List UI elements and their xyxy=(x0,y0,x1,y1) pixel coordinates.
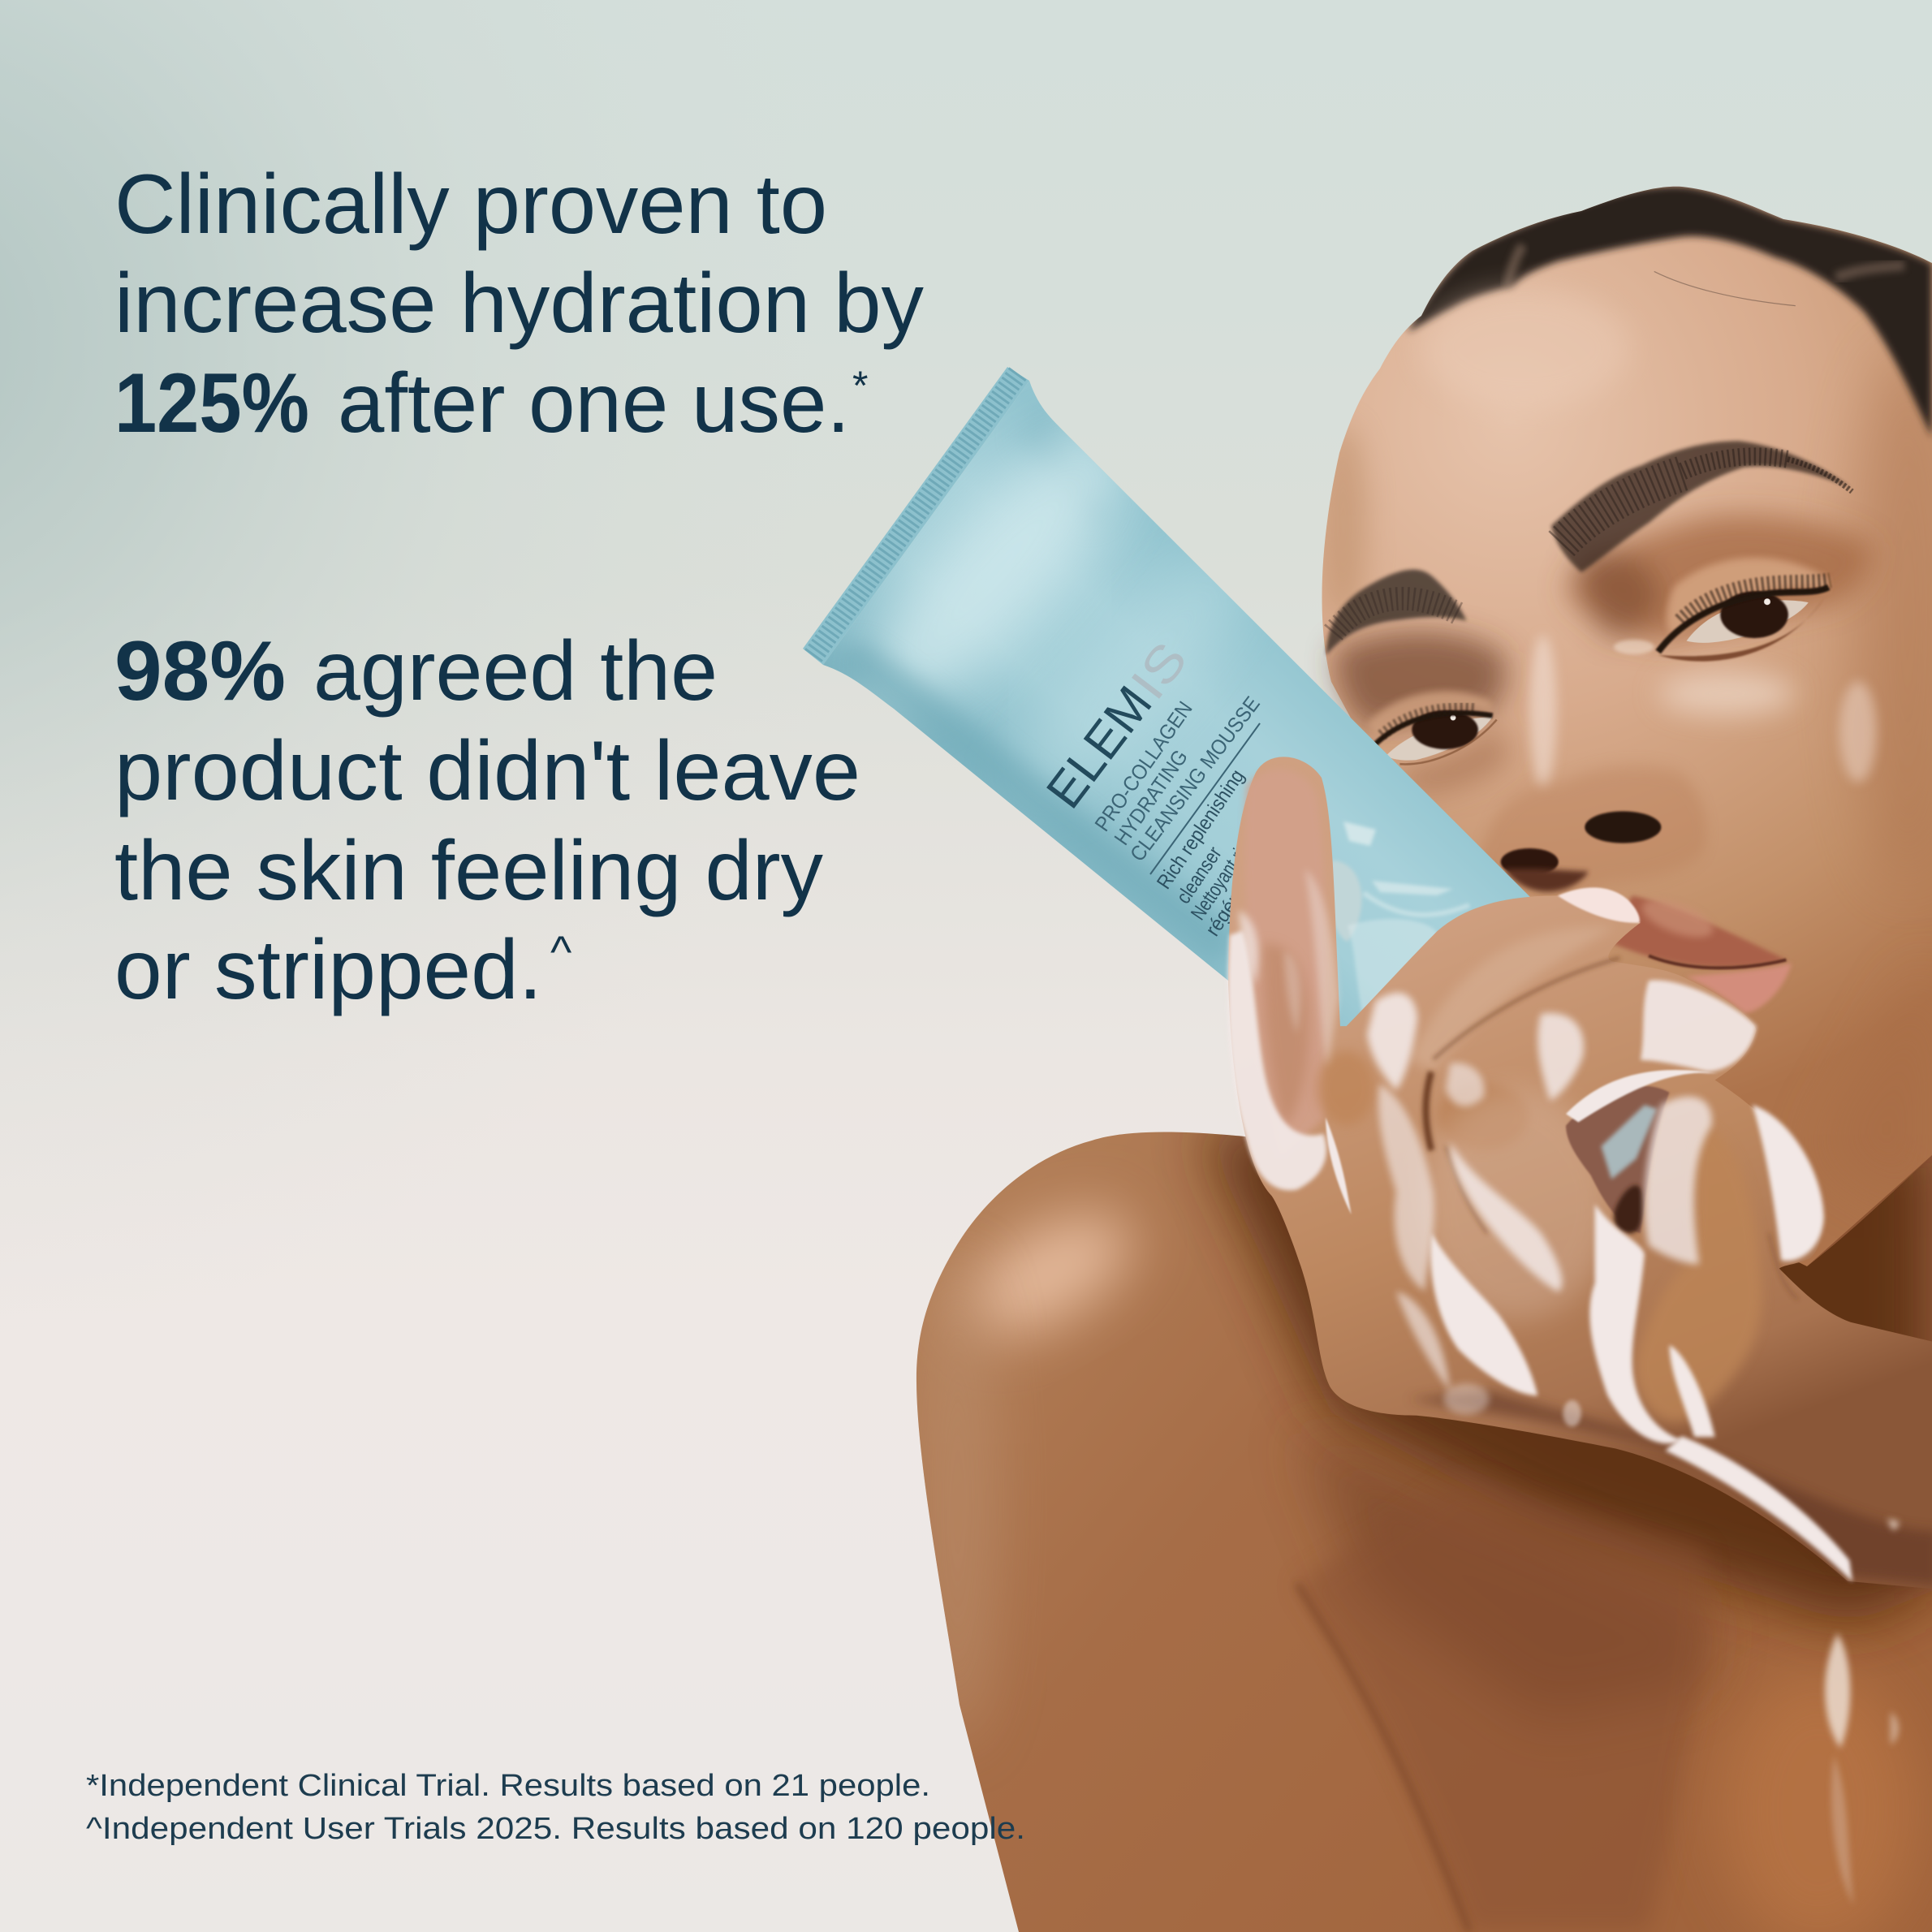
footnotes: ^Independent User Trials 2025. Results based on 120 people. xyxy=(86,1812,1025,1846)
headline: user trial claim: ^ xyxy=(550,926,571,977)
footnotes: *Independent Clinical Trial. Results based on 21 people. xyxy=(86,1769,930,1803)
arm and chest shadow band xyxy=(1307,1518,1692,1929)
product label: name and description: cleanser xyxy=(1172,843,1227,908)
tube cap between fingers xyxy=(1566,1086,1670,1233)
product label: name and description xyxy=(1089,692,1265,940)
nose and cheek highlights xyxy=(1529,635,1877,788)
product label: name and description: PRO-COLLAGEN xyxy=(1089,696,1197,835)
eye: right xyxy=(1658,558,1831,662)
product label: ELEMIS logo: ELEM xyxy=(1036,676,1163,818)
icon: left eyebrow xyxy=(1326,570,1466,655)
product label: name and description: CLEANSING MOUSSE xyxy=(1125,692,1265,866)
model: face xyxy=(1316,187,1932,1266)
headline: user trial claim: the skin feeling dry xyxy=(114,824,823,918)
eye socket shadows xyxy=(1335,515,1872,793)
headline: hydration claim: increase hydration by xyxy=(114,257,924,351)
thumbnail xyxy=(1558,887,1640,923)
headline: hydration claim: Clinically proven to xyxy=(114,157,827,252)
tube crimp xyxy=(803,367,1029,665)
foam marks on tube xyxy=(1328,822,1469,1023)
product label: ELEMIS logo: IS xyxy=(1120,632,1198,709)
tube body xyxy=(823,381,1534,1104)
headline: hydration claim: * xyxy=(852,363,868,408)
product tube xyxy=(803,367,1530,1026)
headline: user trial claim: product didn't leave xyxy=(114,724,860,818)
footnotes xyxy=(86,1769,1025,1846)
product label: name and description: Nettoyant riche xyxy=(1187,824,1265,924)
eye: left xyxy=(1368,691,1497,764)
icon: right eyebrow xyxy=(1551,441,1852,572)
finger creases xyxy=(1425,958,1798,1300)
fingers shading xyxy=(1244,770,1762,1422)
headline: user trial claim xyxy=(114,624,860,1017)
face shading xyxy=(1319,287,1630,619)
headline: hydration claim xyxy=(114,157,924,451)
headline: user trial claim: agreed the xyxy=(313,624,718,718)
stat: 98%: 98% xyxy=(114,624,286,718)
foam streaks xyxy=(1227,869,1852,1582)
stat: 125%: 125% xyxy=(114,356,309,451)
model: hand with foam xyxy=(1227,757,1932,1589)
headline: hydration claim: after one use. xyxy=(338,356,850,451)
hair xyxy=(1408,186,1932,437)
lips xyxy=(1607,892,1792,1012)
product label: name and description: HYDRATING xyxy=(1109,745,1192,849)
icon: nose xyxy=(1479,766,1707,898)
product label: ELEMIS logo xyxy=(1036,632,1198,818)
product label: name and description: Rich replenishing xyxy=(1153,765,1249,893)
product label: name and description: régén xyxy=(1201,887,1248,940)
tube shading xyxy=(862,428,1240,961)
hand silhouette xyxy=(1228,757,1932,1589)
model: shoulder and chest xyxy=(893,1120,1932,1932)
headline: user trial claim: or stripped. xyxy=(114,923,542,1017)
forearm shadow xyxy=(1408,1391,1932,1585)
foam drips on chest xyxy=(1825,1519,1900,1905)
